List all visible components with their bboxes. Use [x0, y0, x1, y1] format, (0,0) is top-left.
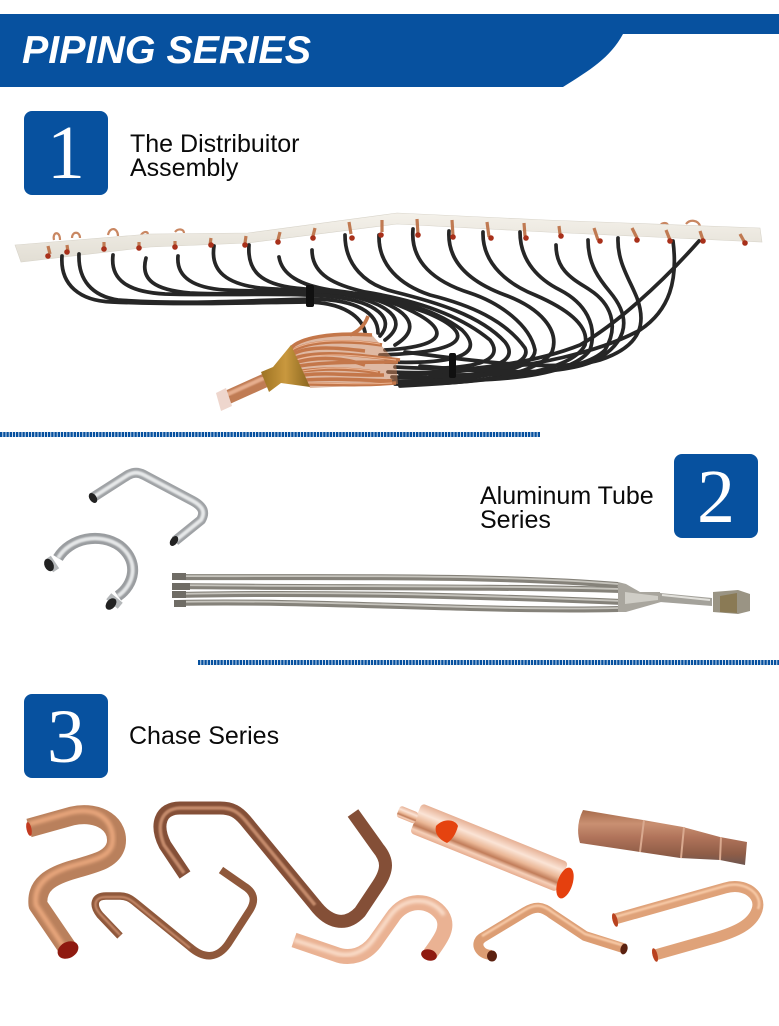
number badge 2: 2 — [697, 455, 735, 539]
product photo: distributor assembly — [15, 213, 762, 411]
product photo: copper cylinder — [392, 796, 577, 901]
title: PIPING SERIES — [22, 29, 311, 72]
label: Aluminum Tube Series: Aluminum Tube — [480, 482, 654, 510]
black hose bundle — [62, 229, 699, 386]
number badge 2 — [674, 454, 758, 539]
dotted divider 1 — [0, 432, 540, 437]
product photo: silver U bend — [87, 473, 203, 548]
product photo: stepped reducer — [578, 810, 747, 865]
label: Aluminum Tube Series: Series — [480, 506, 551, 534]
header banner — [0, 14, 779, 87]
product photo: large S tube — [25, 811, 117, 962]
red tube mouths — [45, 232, 748, 259]
number badge 3: 3 — [47, 695, 85, 779]
zip ties — [306, 285, 314, 307]
product photo: dark long bend — [160, 808, 386, 921]
copper stub ends on rail — [48, 219, 745, 254]
product photo: aluminum tube manifold — [172, 573, 750, 614]
product photo: light U bend — [294, 901, 445, 962]
dotted divider 2 — [198, 660, 779, 665]
copper fan backing — [291, 334, 398, 388]
brass fitting — [261, 345, 310, 392]
label: The Distribuitor Assembly: Assembly — [130, 154, 239, 182]
product photo: medium dark bend — [95, 870, 253, 956]
outlet copper pipe — [226, 380, 266, 398]
product photo: small offset bend — [478, 906, 629, 962]
number badge 1 — [24, 111, 108, 195]
number badge 1: 1 — [47, 111, 85, 195]
white rail — [15, 213, 762, 262]
rear copper stubs — [54, 221, 700, 240]
copper fan — [291, 316, 400, 385]
label: The Distribuitor Assembly: The Distribuitor — [130, 130, 300, 158]
product photo: long U bend — [611, 885, 759, 962]
label: Chase Series: Chase Series — [129, 722, 279, 750]
number badge 3 — [24, 694, 108, 779]
product photo: silver return bend — [42, 538, 133, 612]
